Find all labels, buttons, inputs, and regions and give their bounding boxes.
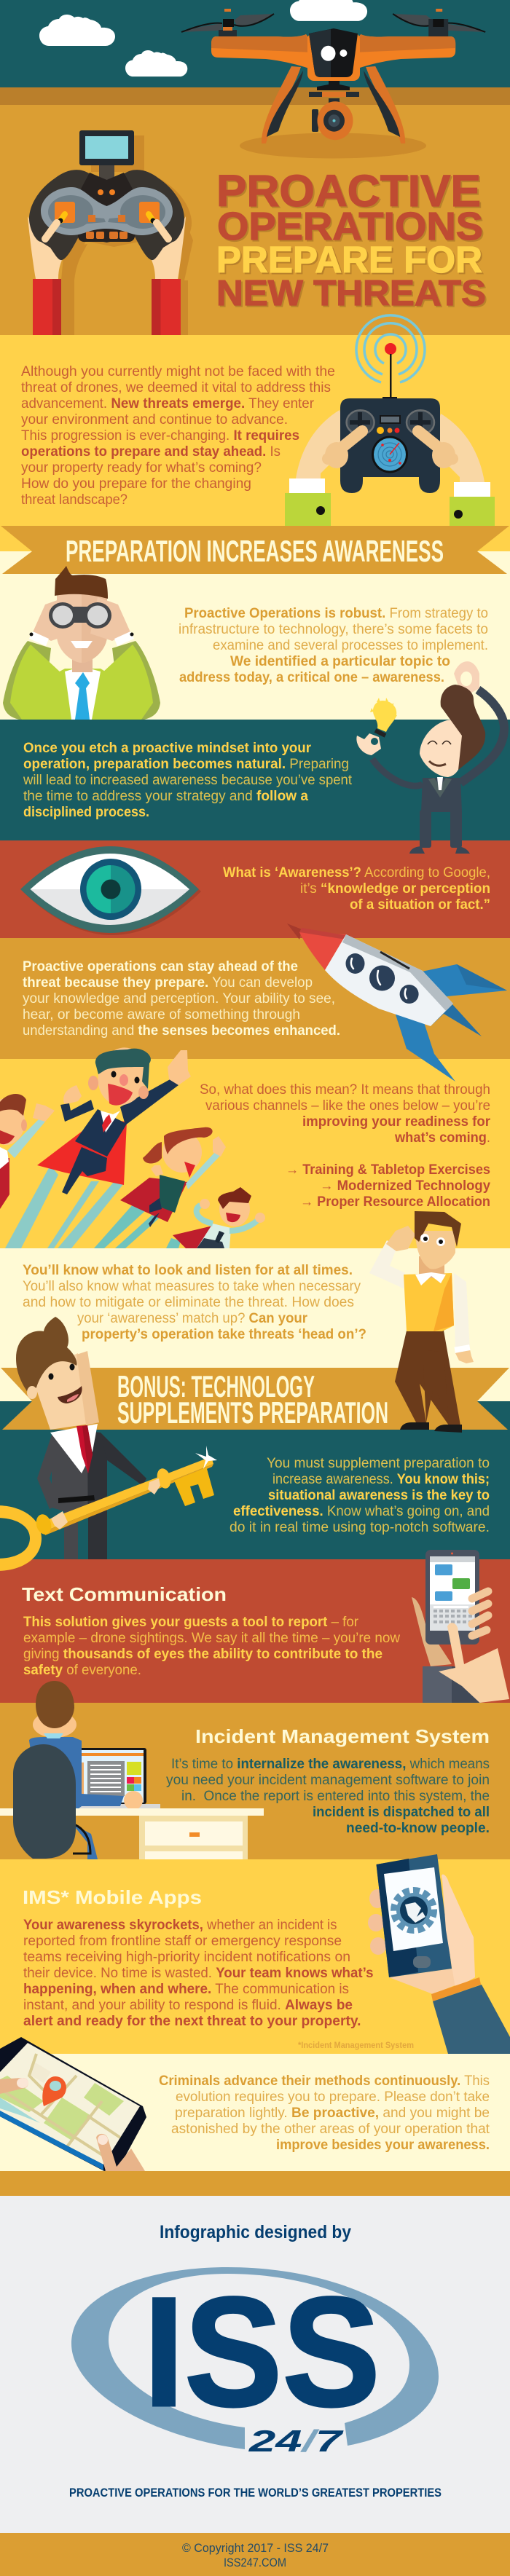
- text block: supplement preparation: [230, 1456, 490, 1535]
- text block: what does this mean: various channels – like the ones below – you’re: [205, 1098, 490, 1114]
- text block: proactive operations is robust: examine and several processes to implement.: [213, 638, 488, 653]
- panel: horizon: [0, 87, 510, 105]
- icon: phone in hand: [368, 1854, 510, 2054]
- panel: copyright band: [0, 2533, 510, 2576]
- logo letters: ISS: [144, 2265, 380, 2439]
- text block: what is awareness: of a situation or fact.”: [350, 897, 490, 913]
- tagline: PROACTIVE OPERATIONS FOR THE WORLD’S GREATEST PROPERTIES: [69, 2486, 442, 2500]
- icon: man with binoculars: [3, 566, 160, 720]
- icon: radio controller with antenna: [285, 315, 495, 526]
- title: PREPARE FOR: [216, 239, 482, 280]
- text block: incident management system: need-to-know people.: [346, 1821, 490, 1836]
- text block: what is awareness: What is ‘Awareness’? According to Google,: [223, 865, 490, 881]
- text block: text communication: giving thousands of eyes the ability to contribute to the: [23, 1647, 382, 1662]
- icon: person at desk with laptop: [0, 1681, 264, 1859]
- icon: small hero: [173, 1187, 265, 1248]
- text block: stay ahead: understanding and the senses becomes enhanced.: [23, 1023, 340, 1039]
- text block: what does this mean: → Modernized Technology: [320, 1178, 490, 1194]
- text block: intro: How do you prepare for the changing: [21, 476, 251, 492]
- text block: intro: [21, 364, 335, 508]
- icon: man with light bulb: [356, 661, 504, 854]
- heading: infographic designed by: Infographic designed by: [160, 2222, 351, 2242]
- title: NEW THREATS: [216, 274, 486, 313]
- icon: left controller with hands: [28, 130, 193, 335]
- copyright: [182, 2541, 329, 2569]
- text block: ims mobile apps: teams receiving high-priority incident notifications on: [23, 1950, 350, 1965]
- text block: what does this mean: → Training & Tabletop Exercises: [286, 1162, 490, 1178]
- text block: proactive operations is robust: infrastructure to technology, there’s some facets to: [178, 622, 488, 637]
- icon: big hero: [37, 1042, 191, 1194]
- text block: intro: threat landscape?: [21, 492, 128, 508]
- icon: clouds: [39, 0, 367, 76]
- panel: criminals advance: [0, 2054, 510, 2171]
- text block: supplement preparation: increase awareness. You know this;: [272, 1472, 490, 1487]
- text block: intro: Although you currently might not be faced with the: [21, 364, 335, 379]
- text block: proactive mindset: operation, preparation becomes natural. Preparing: [23, 757, 349, 772]
- text block: proactive operations is robust: address today, a critical one – awareness.: [179, 670, 444, 685]
- logo: ISS 24/7: [71, 2265, 439, 2458]
- text block: text communication: [22, 1583, 400, 1678]
- text block: you will know: You’ll know what to look and listen for at all times.: [23, 1263, 353, 1278]
- text block: incident management system: you need your incident management software to join: [166, 1773, 490, 1788]
- text block: criminals advance: astonished by the other areas of your operation that: [171, 2122, 490, 2137]
- text block: criminals advance: improve besides your awareness.: [276, 2138, 490, 2153]
- copyright: ISS247.COM: [224, 2556, 286, 2569]
- heading: incident management system: Incident Management System: [195, 1725, 490, 1747]
- text block: stay ahead: hear, or become aware of something through: [23, 1007, 300, 1023]
- text block: you will know: and how to mitigate or eliminate the threat. How does: [23, 1295, 354, 1310]
- text block: text communication: safety of everyone.: [23, 1663, 141, 1678]
- heading: ims mobile apps: IMS* Mobile Apps: [23, 1886, 202, 1908]
- panel: proactive operations: [0, 551, 510, 720]
- title: [216, 166, 486, 313]
- icon: eye: [20, 846, 201, 935]
- panel: what does this mean: [0, 1059, 510, 1248]
- icon: map on smartphone: [0, 2037, 146, 2171]
- icon: left hero: [0, 1094, 55, 1209]
- panel: sky: [0, 0, 510, 87]
- text block: proactive mindset: will lead to increased awareness because you’ve spent: [23, 773, 353, 788]
- heading ribbon: preparation increases awareness: [1, 526, 509, 574]
- text block: criminals advance: Criminals advance their methods continuously. This: [159, 2073, 490, 2089]
- icon: smartphone with messages: [412, 1550, 509, 1703]
- text block: proactive mindset: [23, 741, 353, 820]
- text block: criminals advance: preparation lightly. Be proactive, and you might be: [175, 2106, 490, 2121]
- text block: intro: advancement. New threats emerge. They enter: [21, 396, 315, 411]
- text block: you will know: You’ll also know what measures to take when necessary: [23, 1279, 361, 1294]
- text block: ims mobile apps: [23, 1886, 414, 2050]
- heading ribbon: bonus technology: [1, 1368, 509, 1430]
- text block: criminals advance: [159, 2073, 490, 2153]
- panel: incident management system: [0, 1703, 510, 1859]
- heading ribbon: bonus technology: BONUS: TECHNOLOGY: [117, 1369, 315, 1403]
- text block: stay ahead: your knowledge and perception. Your ability to see,: [23, 991, 335, 1007]
- text block: intro: operations to prepare and stay ahead. Is: [21, 444, 280, 460]
- text block: ims mobile apps: their device. No time is wasted. Your team knows what’s: [23, 1966, 373, 1981]
- text block: supplement preparation: effectiveness. Know what’s going on, and: [233, 1504, 490, 1519]
- text block: proactive operations is robust: [178, 606, 488, 685]
- text block: what does this mean: what’s coming.: [394, 1130, 490, 1146]
- text block: incident management system: [166, 1725, 490, 1836]
- text block: criminals advance: evolution requires you to prepare. Please don’t take: [176, 2089, 490, 2105]
- panel: intro: [0, 335, 510, 551]
- logo swoosh: [71, 2267, 439, 2449]
- text block: supplement preparation: situational awareness is the key to: [268, 1488, 490, 1503]
- text block: what is awareness: [223, 865, 490, 913]
- panel: proactive mindset: [0, 720, 510, 840]
- icon: thinking man: [369, 1211, 474, 1433]
- text block: proactive operations is robust: We identified a particular topic to: [230, 654, 450, 669]
- panel: mobile apps: [0, 1859, 510, 2054]
- text block: what does this mean: So, what does this mean? It means that through: [200, 1082, 490, 1098]
- icon: heroine: [120, 1127, 226, 1227]
- panel: spacer band: [0, 2171, 510, 2196]
- title: OPERATIONS: [217, 205, 483, 248]
- text block: what does this mean: improving your readiness for: [302, 1114, 491, 1130]
- logo 24/7: 24 /7: [248, 2424, 344, 2458]
- panel: awareness definition: [0, 840, 510, 938]
- text block: what does this mean: [200, 1082, 491, 1210]
- text block: incident management system: It’s time to internalize the awareness, which means: [171, 1757, 490, 1772]
- text block: text communication: example – drone sightings. We say it all the time – you’re now: [23, 1631, 400, 1646]
- text block: incident management system: incident is dispatched to all: [313, 1805, 490, 1820]
- panel: supplement preparation: [0, 1401, 510, 1559]
- text block: supplement preparation: You must supplement preparation to: [267, 1456, 490, 1471]
- text block: stay ahead: [23, 959, 340, 1039]
- text block: intro: your environment and continue to advance.: [21, 412, 288, 428]
- icon: rocket: [287, 923, 507, 1082]
- panel: hero: [0, 105, 510, 335]
- text block: what is awareness: it’s “knowledge or perception: [300, 881, 490, 897]
- text block: text communication: This solution gives your guests a tool to report – for: [23, 1615, 359, 1630]
- copyright: © Copyright 2017 - ISS 24/7: [182, 2541, 329, 2555]
- panel: text communication: [0, 1559, 510, 1703]
- text block: ims mobile apps: reported from frontline staff or emergency response: [23, 1934, 342, 1949]
- text block: you will know: [23, 1263, 366, 1342]
- heading: text communication: Text Communication: [22, 1583, 227, 1605]
- text block: ims mobile apps: alert and ready for the next threat to your property.: [23, 2014, 361, 2029]
- text block: intro: your property ready for what’s coming?: [21, 460, 262, 476]
- text block: supplement preparation: do it in real time using top-notch software.: [230, 1520, 490, 1535]
- text block: you will know: property’s operation take threats ‘head on’?: [82, 1327, 366, 1342]
- text block: stay ahead: threat because they prepare. You can develop: [23, 975, 313, 990]
- text block: intro: threat of drones, we deemed it vital to address this: [21, 380, 331, 395]
- text block: proactive mindset: disciplined process.: [23, 805, 149, 820]
- text block: ims mobile apps: instant, and your ability to respond is fluid. Always be: [23, 1998, 353, 2013]
- panel: stay ahead: [0, 938, 510, 1059]
- icon: drone: [181, 9, 485, 159]
- icon: man with golden key: [0, 1317, 217, 1571]
- text block: you will know: your ‘awareness’ match up? Can your: [77, 1311, 308, 1326]
- footnote: *Incident Management System: [298, 2040, 414, 2050]
- text block: incident management system: in. Once the report is entered into this system, the: [181, 1789, 490, 1804]
- text block: what does this mean: → Proper Resource Allocation: [300, 1194, 490, 1210]
- text block: ims mobile apps: happening, when and where. The communication is: [23, 1982, 349, 1997]
- panel: know what to look for: [0, 1248, 510, 1401]
- text block: proactive mindset: Once you etch a proactive mindset into your: [23, 741, 312, 756]
- text block: proactive operations is robust: Proactive Operations is robust. From strategy to: [184, 606, 488, 621]
- panel: credits: [0, 2196, 510, 2533]
- text block: intro: This progression is ever-changing. It requires: [21, 428, 299, 444]
- icon: flying superheroes: [0, 1042, 265, 1248]
- text block: proactive mindset: the time to address your strategy and follow a: [23, 789, 308, 804]
- text block: ims mobile apps: Your awareness skyrockets, whether an incident is: [23, 1918, 337, 1933]
- text block: stay ahead: Proactive operations can stay ahead of the: [23, 959, 298, 974]
- title: PROACTIVE: [216, 166, 481, 216]
